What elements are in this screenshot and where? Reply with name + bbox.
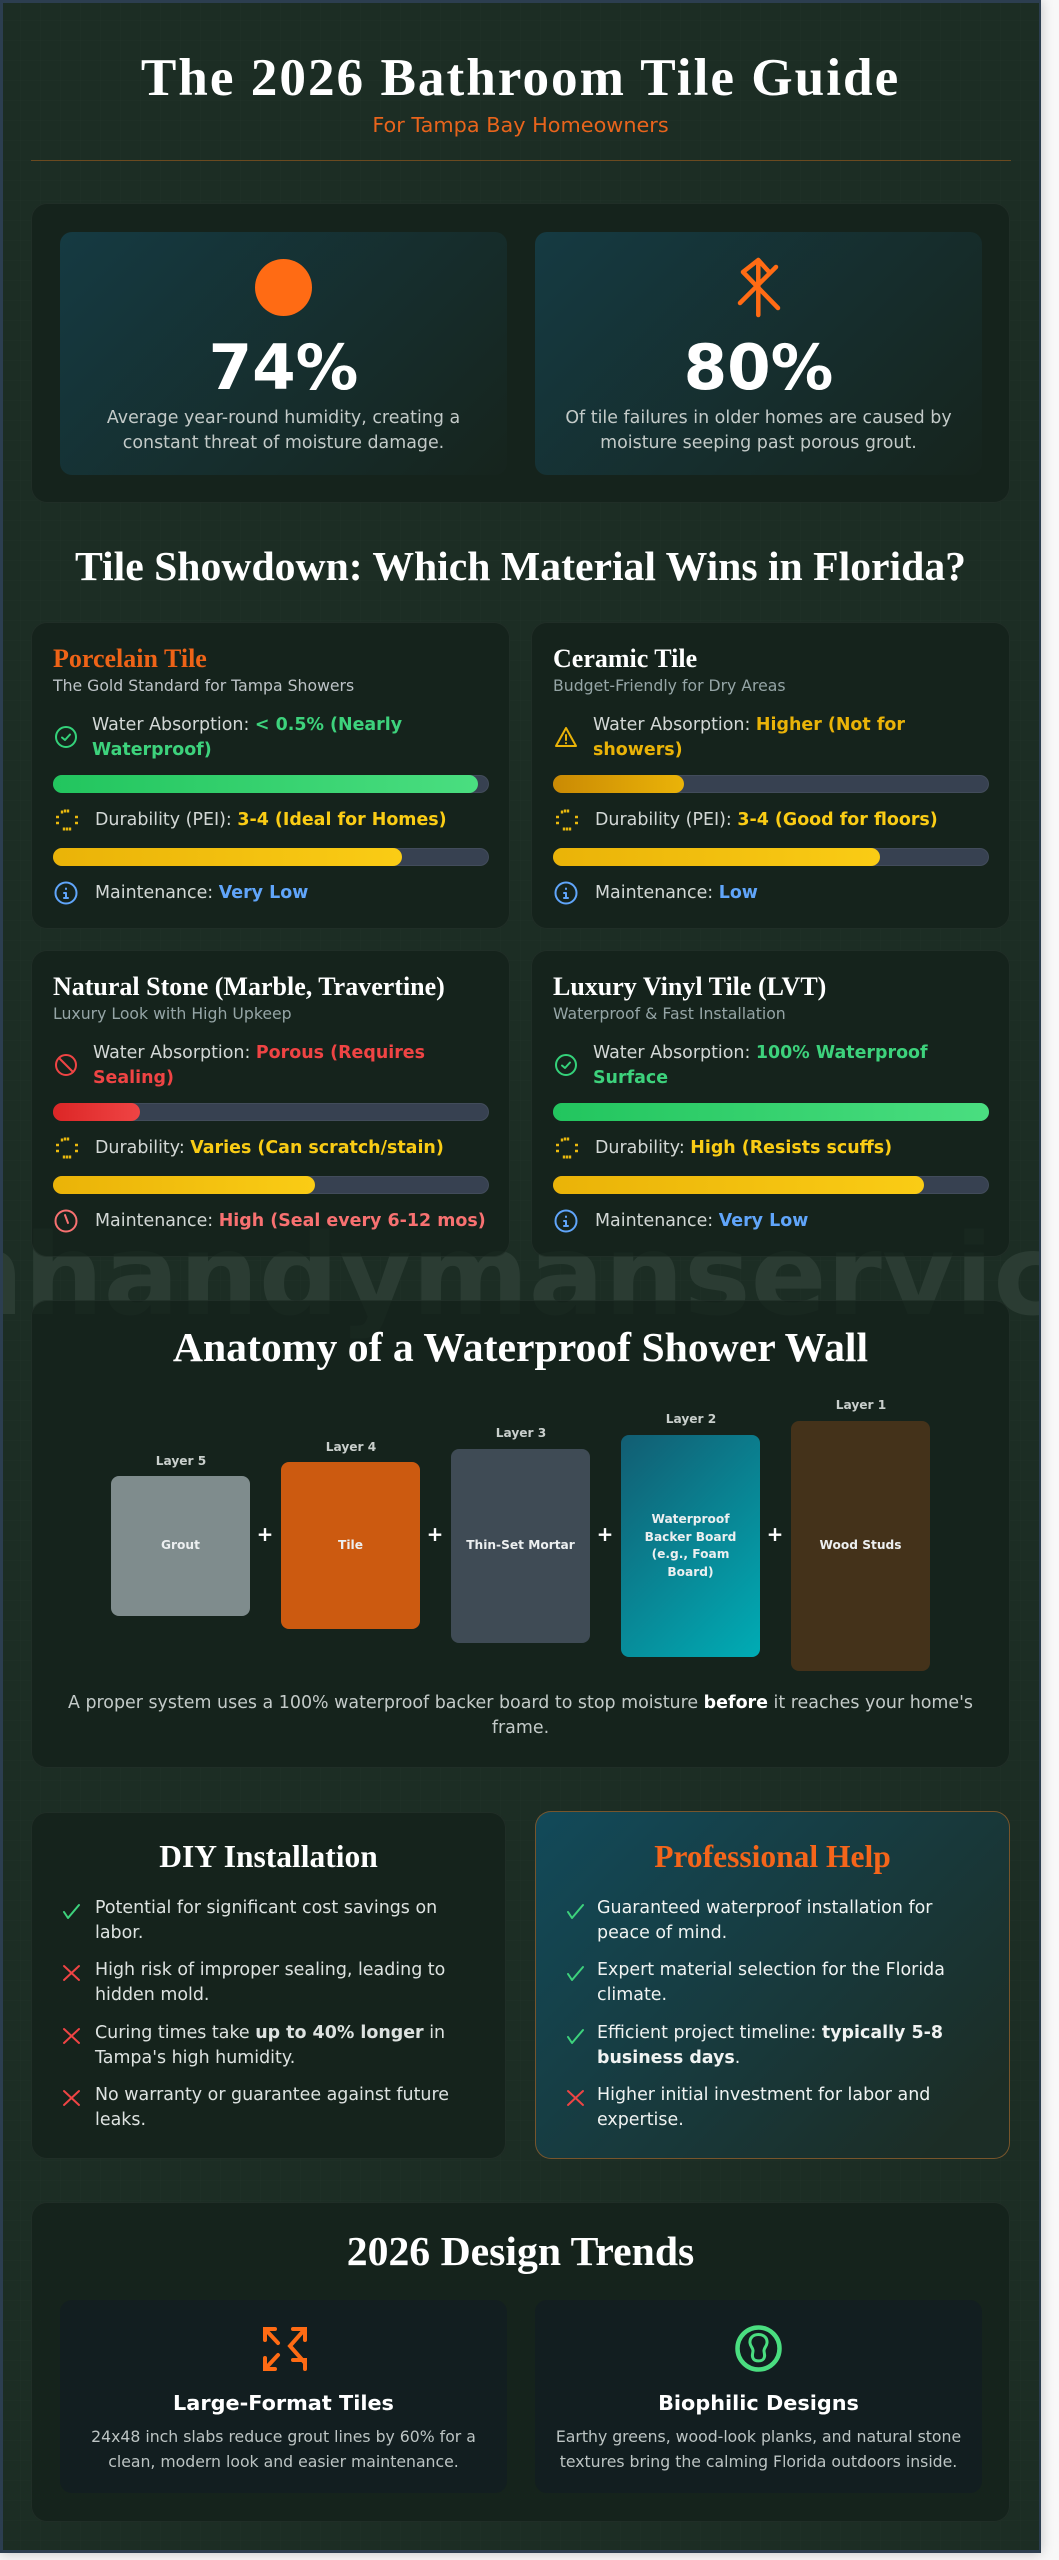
layer block: Tile — [338, 1538, 363, 1552]
trend card: biophilic designs — [535, 2300, 982, 2493]
icon: check circle — [555, 1054, 577, 1076]
icon: info circle — [554, 1210, 578, 1232]
plus sign: + — [597, 1522, 613, 1546]
card: natural stone — [31, 950, 510, 1257]
trend name: Biophilic Designs — [658, 2391, 859, 2415]
maintenance text: Maintenance: High (Seal every 6-12 mos) — [95, 1211, 486, 1231]
plus sign: + — [767, 1522, 783, 1546]
water absorption text — [593, 1043, 928, 1088]
trend description: Earthy greens, wood-look planks, and natural stone — [556, 2427, 961, 2446]
stat description: moisture seeping past porous grout. — [600, 432, 917, 452]
maintenance text: Maintenance: Very Low — [95, 883, 308, 903]
stat description — [565, 408, 952, 452]
list item: Higher initial investment for labor and — [597, 2085, 930, 2105]
plus sign: + — [257, 1522, 273, 1546]
water absorption text: Waterproof) — [92, 740, 212, 760]
layer block: Wood Studs — [820, 1538, 901, 1552]
stat number: 80% — [684, 331, 833, 404]
list item: peace of mind. — [597, 1922, 727, 1942]
water absorption text — [93, 1043, 425, 1088]
layer label: Layer 4 — [326, 1440, 376, 1454]
layer block: Thin-Set Mortar — [466, 1538, 575, 1552]
water absorption text: showers) — [593, 740, 683, 760]
water absorption bar — [53, 1103, 489, 1121]
icon: durability — [56, 1138, 78, 1158]
layer block — [451, 1449, 590, 1643]
list item: Efficient project timeline: typically 5-8 — [597, 2023, 943, 2043]
header subtitle: For Tampa Bay Homeowners — [372, 113, 669, 137]
water absorption bar — [553, 775, 989, 793]
panel: DIY installation — [31, 1812, 506, 2159]
stat description — [107, 408, 460, 452]
stat description: Of tile failures in older homes are caused by — [565, 408, 952, 428]
layer 4: tile — [281, 1440, 420, 1629]
stat card: tile failures — [535, 232, 982, 475]
layer label: Layer 2 — [666, 1412, 716, 1426]
card: porcelain tile — [31, 622, 510, 929]
layer block — [621, 1435, 760, 1657]
stat description: Average year-round humidity, creating a — [107, 408, 460, 428]
icon: solid circle — [255, 259, 312, 316]
panel: design trends — [31, 2202, 1010, 2522]
card name: Ceramic Tile — [553, 644, 697, 673]
card subtitle: Luxury Look with High Upkeep — [53, 1004, 292, 1023]
list item: Guaranteed waterproof installation for — [597, 1898, 932, 1918]
trend card: large-format tiles — [60, 2300, 507, 2493]
durability bar — [53, 848, 489, 866]
list item: leaks. — [95, 2110, 146, 2130]
list item: climate. — [597, 1984, 667, 2004]
layer label: Layer 3 — [496, 1426, 546, 1440]
anatomy caption: A proper system uses a 100% waterproof backer board to stop moisture before it reaches your home's — [68, 1693, 973, 1713]
layer 5: grout — [111, 1454, 250, 1616]
durability text: Durability (PEI): 3-4 (Good for floors) — [595, 810, 938, 830]
durability text: Durability: High (Resists scuffs) — [595, 1138, 892, 1158]
durability bar — [553, 848, 989, 866]
trend description: textures bring the calming Florida outdoors inside. — [560, 2452, 957, 2470]
layer block — [791, 1421, 930, 1671]
icon: durability — [556, 810, 578, 830]
water absorption text: Water Absorption: < 0.5% (Nearly — [92, 715, 402, 735]
stat card: humidity — [60, 232, 507, 475]
card: luxury vinyl tile — [531, 950, 1010, 1257]
water absorption text: Sealing) — [93, 1068, 174, 1088]
icon: info circle — [554, 882, 578, 904]
anatomy caption — [68, 1693, 973, 1738]
layer block — [111, 1476, 250, 1616]
card name: Porcelain Tile — [53, 644, 207, 673]
list item — [63, 1960, 445, 2004]
icon: expand arrows — [263, 2327, 307, 2371]
panel: professional help — [535, 1811, 1010, 2159]
list item: hidden mold. — [95, 1984, 209, 2004]
water absorption text — [92, 715, 402, 760]
water absorption bar — [53, 775, 489, 793]
water absorption text: Water Absorption: Higher (Not for — [593, 715, 905, 735]
icon: clock — [54, 1210, 78, 1232]
icon: durability — [556, 1138, 578, 1158]
trend description: 24x48 inch slabs reduce grout lines by 60% for a — [91, 2427, 476, 2446]
list item: expertise. — [597, 2110, 684, 2130]
trend description — [535, 2425, 982, 2474]
stat description: constant threat of moisture damage. — [123, 432, 444, 452]
list item — [63, 1898, 437, 1942]
stat number: 74% — [209, 331, 358, 404]
layer label: Layer 1 — [836, 1398, 886, 1412]
panel heading: Professional Help — [654, 1839, 891, 1874]
icon: ban circle — [55, 1054, 77, 1076]
list item: High risk of improper sealing, leading to — [95, 1960, 445, 1980]
header title: The 2026 Bathroom Tile Guide — [141, 48, 900, 107]
trend description: clean, modern look and easier maintenance. — [108, 2452, 459, 2470]
trend name: Large-Format Tiles — [173, 2391, 394, 2415]
list item: Expert material selection for the Florida — [597, 1960, 945, 1980]
water absorption text — [593, 715, 905, 760]
card subtitle: Waterproof & Fast Installation — [553, 1004, 786, 1023]
icon: check circle — [55, 726, 77, 748]
water absorption bar — [553, 1103, 989, 1121]
icon: durability — [56, 810, 78, 830]
icon: info circle — [54, 882, 78, 904]
layer label: Layer 5 — [156, 1454, 206, 1468]
list item: Potential for significant cost savings on — [95, 1898, 437, 1918]
panel: key statistics — [31, 203, 1010, 503]
layer block: Waterproof Backer Board (e.g., Foam Board) — [645, 1512, 736, 1578]
list item: No warranty or guarantee against future — [95, 2085, 449, 2105]
card subtitle: The Gold Standard for Tampa Showers — [53, 676, 354, 695]
list item — [63, 2023, 445, 2068]
list item: Tampa's high humidity. — [95, 2048, 295, 2068]
card subtitle: Budget-Friendly for Dry Areas — [553, 676, 786, 695]
card name: Natural Stone (Marble, Travertine) — [53, 972, 445, 1001]
maintenance text: Maintenance: Very Low — [595, 1211, 808, 1231]
list item — [567, 1898, 932, 1942]
water absorption text: Water Absorption: Porous (Requires — [93, 1043, 425, 1063]
durability text: Durability: Varies (Can scratch/stain) — [95, 1138, 444, 1158]
list item — [567, 1960, 945, 2004]
layer 2: backer board — [621, 1412, 760, 1657]
durability text: Durability (PEI): 3-4 (Ideal for Homes) — [95, 810, 447, 830]
heading: anatomy: Anatomy of a Waterproof Shower Wall — [173, 1325, 868, 1371]
maintenance text: Maintenance: Low — [595, 883, 758, 903]
anatomy caption: frame. — [492, 1718, 549, 1738]
list item: labor. — [95, 1922, 143, 1942]
list item — [566, 2021, 986, 2071]
layer block: Grout — [161, 1538, 200, 1552]
durability bar — [53, 1176, 489, 1194]
list item — [63, 2085, 449, 2130]
trend description — [60, 2425, 507, 2474]
layer 1: wood studs — [791, 1398, 930, 1671]
heading: tile showdown: Tile Showdown: Which Material Wins in Florida? — [75, 544, 966, 590]
list item: Curing times take up to 40% longer in — [95, 2023, 445, 2043]
layer block — [281, 1462, 420, 1629]
icon: keyhole circle — [735, 2325, 782, 2372]
panel heading: 2026 Design Trends — [347, 2229, 694, 2275]
plus sign: + — [427, 1522, 443, 1546]
layer 3: mortar — [451, 1426, 590, 1643]
water absorption text: Surface — [593, 1068, 668, 1088]
durability bar — [553, 1176, 989, 1194]
card: ceramic tile — [531, 622, 1010, 929]
icon: rune symbol — [738, 258, 780, 318]
header divider — [31, 160, 1011, 161]
panel heading: DIY Installation — [159, 1839, 378, 1874]
card name: Luxury Vinyl Tile (LVT) — [553, 972, 826, 1001]
list item — [566, 2083, 986, 2133]
list item: business days. — [597, 2048, 740, 2068]
panel: shower wall anatomy — [31, 1300, 1010, 1768]
icon: warning triangle — [555, 727, 577, 747]
water absorption text: Water Absorption: 100% Waterproof — [593, 1043, 928, 1063]
